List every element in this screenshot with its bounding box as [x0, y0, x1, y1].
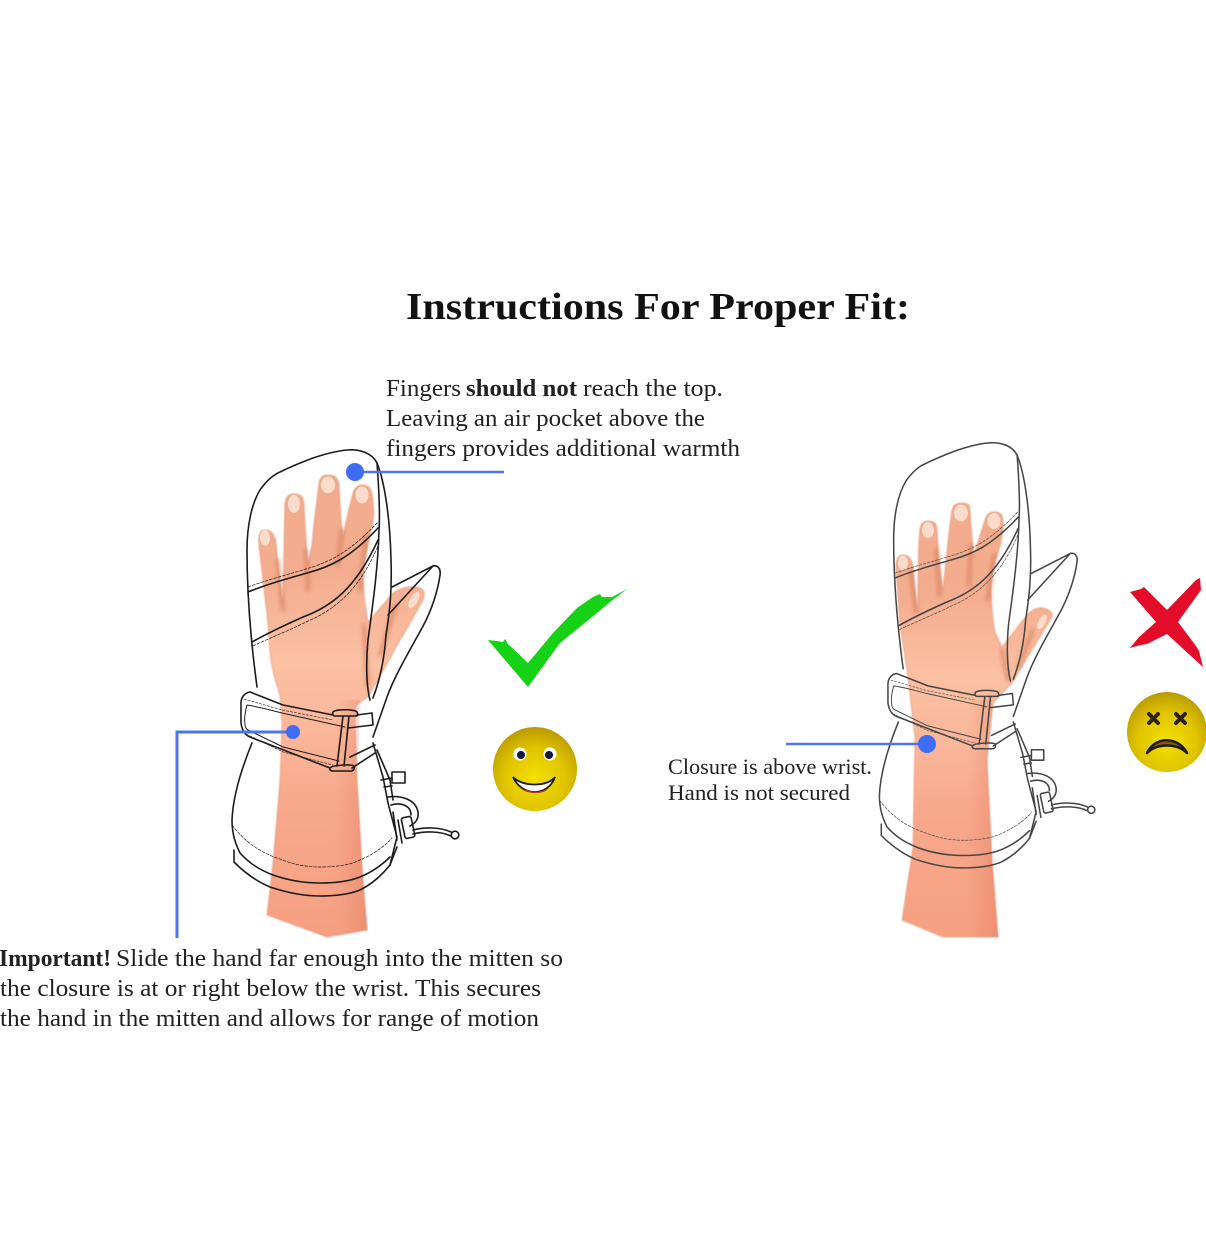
- text block: closure above wrist: [668, 754, 872, 805]
- icon: red X mark: [1130, 578, 1203, 667]
- mitten outline: [232, 450, 459, 896]
- fingernails: [898, 504, 1049, 631]
- title: Instructions For Proper Fit:: [406, 286, 910, 328]
- icon: happy smiley: [493, 727, 577, 811]
- callout: top pointer: [346, 463, 504, 481]
- text block: important note: the closure is at or right below the wrist. This secures: [0, 976, 541, 1002]
- icon: sad smiley: [1127, 692, 1206, 772]
- text block: fingers should not reach the top: Leaving an air pocket above the: [386, 406, 705, 432]
- text block: fingers should not reach the top: [386, 376, 740, 462]
- callout: wrist pointer: [177, 725, 300, 938]
- illustration: left hand: [259, 475, 424, 937]
- finger shading: [911, 545, 1033, 680]
- panel: correct fit mitten: [232, 450, 459, 937]
- callout: right wrist pointer: [786, 735, 936, 753]
- mitten outline: [879, 443, 1095, 868]
- text block: important note: [0, 946, 563, 1032]
- text block: fingers should not reach the top: fingers provides additional warmth: [386, 436, 740, 462]
- text block: fingers should not reach the top: reach the top.: [583, 376, 723, 402]
- text block: important note: Slide the hand far enough into the mitten so: [116, 946, 563, 972]
- icon: green check mark: [488, 589, 627, 687]
- text block: closure above wrist: Hand is not secured: [668, 780, 850, 805]
- text block: important note: the hand in the mitten and allows for range of motion: [0, 1006, 539, 1032]
- panel: incorrect fit mitten: [879, 443, 1095, 937]
- text block: important note: Important!: [0, 946, 111, 972]
- fingernails: [260, 476, 422, 610]
- finger shading: [278, 530, 396, 685]
- illustration: right hand: [896, 503, 1052, 937]
- text block: fingers should not reach the top: Fingers: [386, 376, 461, 402]
- text block: fingers should not reach the top: should not: [466, 376, 577, 402]
- text block: closure above wrist: Closure is above wrist.: [668, 754, 872, 779]
